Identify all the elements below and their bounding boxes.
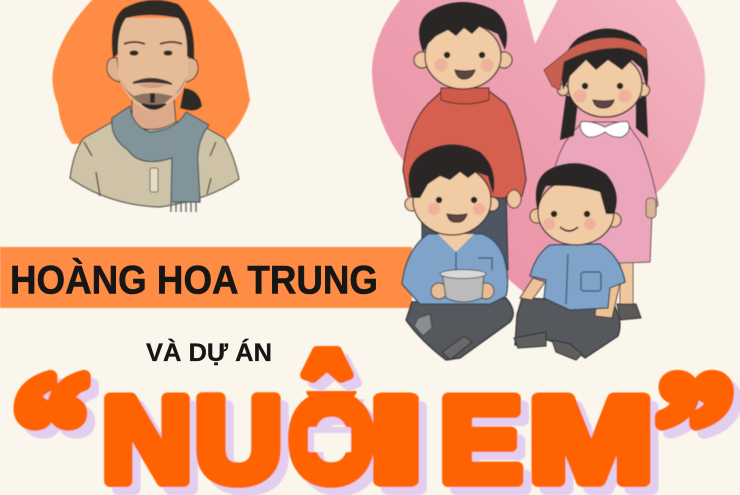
blue shirt [530,244,625,310]
hair [536,163,617,214]
collar [438,234,474,252]
hand [507,190,521,208]
headband [544,38,647,90]
portrait: Hoàng Hoa Trung [52,0,250,212]
title letters [13,342,734,495]
pocket [581,272,601,291]
child: standing girl in pink dress [544,28,658,320]
hair [562,28,648,90]
trousers [422,190,508,270]
shirt placket [566,254,568,304]
ear [636,84,650,96]
scarf [112,106,209,202]
heading: Hoàng Hoa Trung: HOÀNG HOA TRUNG [10,258,378,302]
trousers [406,298,513,360]
hand [646,198,656,218]
red sweater [403,92,526,198]
trousers [515,298,620,358]
icon: orange brush circle [52,0,250,144]
hair ponytail [180,88,202,111]
ribbon background [0,247,412,308]
eyebrows and eyes [124,42,182,44]
sandal [617,304,641,320]
sweater collar [441,88,489,104]
hair [409,144,494,198]
heart background [372,0,705,295]
shirt buttons [150,168,158,192]
hair [112,0,194,60]
face [568,53,642,117]
lips [138,84,166,88]
legs [620,262,633,304]
child: standing boy in red sweater [403,2,526,270]
shirt placket [456,250,492,270]
scarf fringe [171,202,196,212]
features [582,83,588,89]
ears [405,197,419,211]
face [538,179,614,245]
letter O counter [308,427,351,452]
ears [530,209,544,223]
collar [580,122,629,137]
features [444,52,450,58]
ears [107,58,198,82]
arms [520,278,620,318]
face [425,23,501,89]
neck [132,100,176,130]
blue shirt [402,234,508,304]
banner: name ribbon [0,247,412,308]
shoes [442,336,472,360]
beard and moustache [119,76,187,107]
shoes [514,332,546,348]
braids [560,95,648,140]
ears [414,52,430,68]
child: sitting boy smiling [514,163,625,360]
title shadow [21,350,740,495]
shirt [70,122,239,207]
face [413,165,491,235]
child: sitting boy with bowl [402,144,513,360]
title: Nuôi Em [13,342,740,495]
face [117,18,188,110]
hands [431,283,447,299]
bowl [442,273,484,302]
knee patch [414,314,432,336]
shirt sleeve folds [84,142,216,196]
subtitle: Và dự án: VÀ DỰ ÁN [146,338,272,367]
features [436,197,442,203]
features [551,211,557,217]
pink dress [554,122,658,264]
hair [419,2,507,52]
